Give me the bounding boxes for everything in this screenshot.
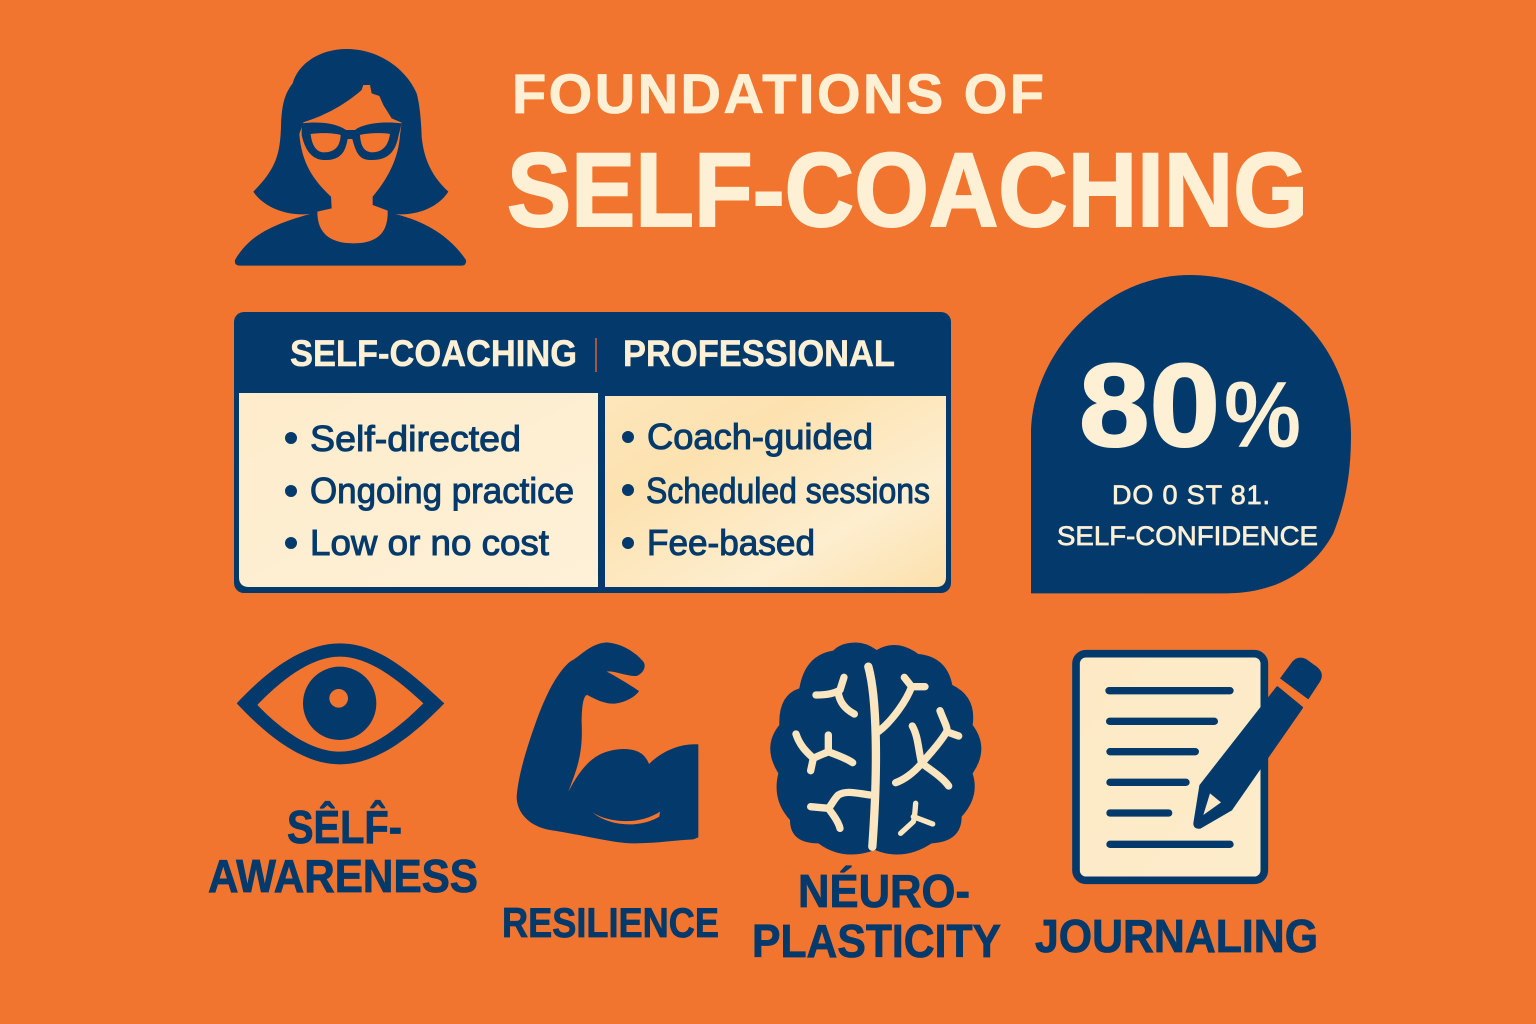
label: self-awareness: AWARENESS <box>208 850 478 902</box>
label: self-awareness: SÊLF̂- <box>287 800 402 853</box>
left column cell <box>239 393 598 587</box>
left column list: Ongoing practice <box>310 470 574 511</box>
icon: person with glasses <box>235 49 466 266</box>
title: SELF-COACHING <box>507 132 1308 249</box>
callout: 80% statistic: % <box>1224 362 1301 467</box>
label: neuroplasticity: PLASTICITY <box>752 915 1001 967</box>
left column list <box>286 418 574 563</box>
icon: notepad and pencil <box>1076 654 1322 880</box>
label: journaling: JOURNALING <box>1035 910 1318 962</box>
icon: brain <box>770 643 981 855</box>
left column list: Self-directed <box>310 418 521 459</box>
title: FOUNDATIONS OF <box>512 62 1044 125</box>
label: neuroplasticity: NÉURO- <box>798 865 970 917</box>
table headers: PROFESSIONAL <box>623 333 895 374</box>
icon: flexed arm <box>517 642 698 843</box>
callout: 80% statistic <box>1031 275 1351 593</box>
right column cell <box>605 396 946 587</box>
callout: 80% statistic: 80 <box>1079 340 1220 472</box>
callout: 80% statistic: SELF-CONFIDENCE <box>1057 521 1318 551</box>
table headers: SELF-COACHING <box>290 333 577 374</box>
label: resilience: RESILIENCE <box>502 899 719 946</box>
label: self-awareness <box>208 800 478 902</box>
label: neuroplasticity <box>752 865 1001 967</box>
right column list: Fee-based <box>647 522 815 563</box>
callout: 80% statistic: DO 0 ST 81. <box>1112 480 1270 510</box>
right column list: Coach-guided <box>647 416 873 457</box>
left column list: Low or no cost <box>310 522 549 563</box>
comparison table <box>234 312 951 593</box>
icon: eye <box>237 643 444 764</box>
table headers <box>290 333 895 374</box>
right column list: Scheduled sessions <box>646 470 930 511</box>
right column list <box>622 416 930 563</box>
title <box>507 62 1308 249</box>
